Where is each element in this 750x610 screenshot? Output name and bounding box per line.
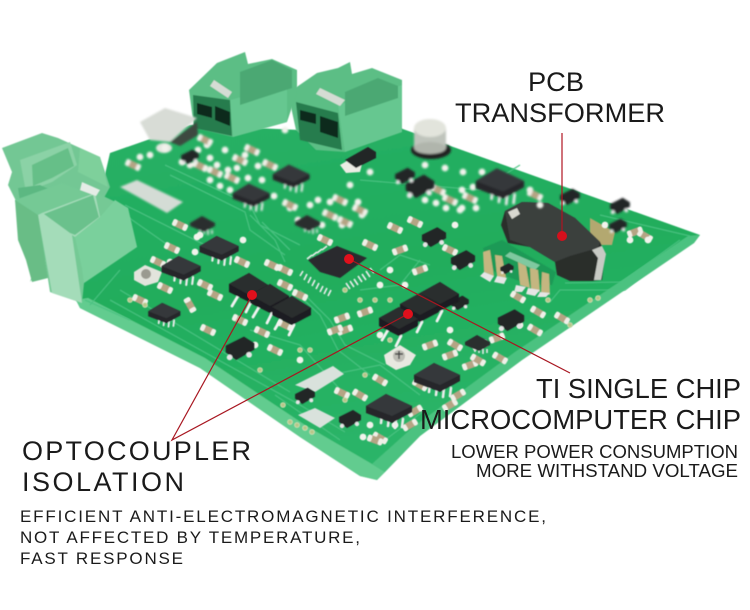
transformer base with solder [480,218,615,297]
dark SOP chips [148,227,524,428]
text: TI chip benefits: LOWER POWER CONSUMPTION [451,442,738,462]
callout line: PCB transformer [557,133,567,241]
rear dark chips [181,150,630,235]
callout line: TI chip [344,254,570,373]
callout lines: optocoupler [172,290,413,440]
text: TI chip benefits: MORE WITHSTAND VOLTAGE [476,461,738,481]
optocoupler trio right [379,282,459,346]
rear left connector [2,133,110,222]
label: optocoupler isolation: OPTOCOUPLER [22,436,251,466]
text: optocoupler benefits: EFFICIENT ANTI-ELECTROMAGNETIC INTERFERENCE, [20,507,546,526]
label: PCB transformer: TRANSFORMER [455,98,665,128]
text: TI chip benefits [451,442,738,481]
white pads near board corner [295,366,344,428]
top-left connector [189,52,297,137]
label: TI single chip: TI SINGLE CHIP [536,373,741,404]
label: optocoupler isolation [22,436,251,497]
photo: PCB board [2,52,700,480]
PCB transformer core [501,202,606,281]
small SMD resistors and capacitors [128,215,654,446]
label: PCB transformer [455,67,665,128]
trimmer potentiometers [134,265,416,370]
circuit board substrate [76,125,700,480]
silver trimmer [140,108,198,153]
label: TI single chip [420,373,741,435]
text: optocoupler benefits [20,507,546,568]
blurred rear SMD parts [124,127,544,229]
white pad strip [120,180,183,213]
front left connector [15,182,137,303]
white and dark parts behind connectors [340,147,376,173]
label: PCB transformer: PCB [528,67,584,97]
circuit traces [85,165,690,440]
label: optocoupler isolation: ISOLATION [22,467,184,497]
text: optocoupler benefits: FAST RESPONSE [20,549,183,568]
text: optocoupler benefits: NOT AFFECTED BY TEMPERATURE, [20,528,360,547]
QFP microcontroller [300,246,374,296]
top-right connector [288,62,402,152]
optocoupler trio [229,273,311,335]
label: TI single chip: MICROCOMPUTER CHIP [420,404,741,435]
capacitor [411,119,451,159]
